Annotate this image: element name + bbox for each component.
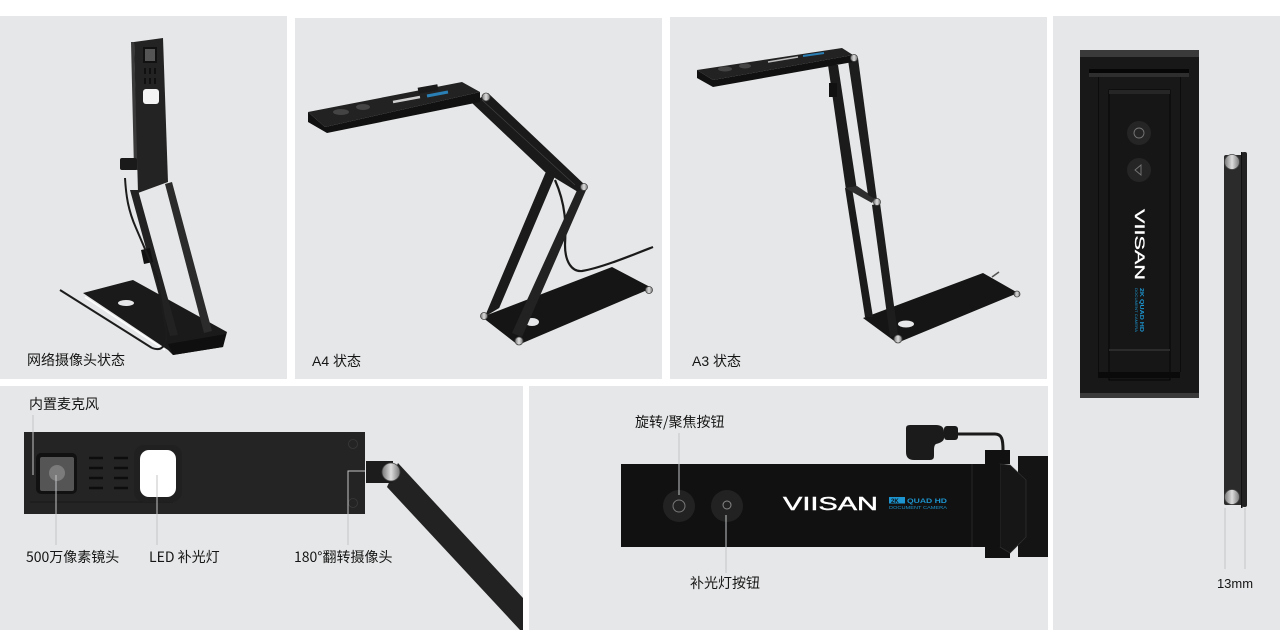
leader lines [33, 415, 365, 545]
icon: rotate focus button [1127, 121, 1151, 145]
light button [711, 490, 743, 522]
product: camera in webcam position [60, 38, 227, 355]
LED fill light [140, 450, 176, 497]
panel: folded size [1053, 16, 1280, 630]
dimension: thickness [1217, 508, 1253, 591]
label: A3 mode: A3 状态 [692, 353, 741, 369]
arm [387, 463, 523, 630]
label: light button: 补光灯按钮 [690, 573, 760, 593]
USB connector and cable [906, 425, 1003, 460]
panel: webcam mode [0, 16, 287, 379]
logo: quad HD vertical: DOCUMENT CAMERA [1134, 288, 1139, 332]
logo: quad HD vertical: 2K QUAD HD [1138, 288, 1144, 332]
screw: hinge pivot [382, 463, 400, 481]
logo: VIISAN: VIISAN [783, 494, 878, 514]
logo: VIISAN vertical: VIISAN [1132, 209, 1148, 280]
dimension: thickness: 13mm [1217, 576, 1253, 591]
label: microphone: 内置麦克风 [29, 394, 99, 414]
lens [36, 453, 77, 494]
hinge block [366, 461, 393, 483]
panel: back details [529, 386, 1048, 630]
icon: light button [1127, 158, 1151, 182]
leader lines [679, 433, 726, 573]
label: webcam mode: 网络摄像头状态 [27, 352, 125, 368]
label: rotate focus button: 旋转/聚焦按钮 [635, 412, 724, 432]
product: camera in A4 position [308, 82, 653, 345]
logo: 2K quad HD: 2K [891, 499, 899, 505]
logo: 2K quad HD [889, 497, 947, 510]
label: LED light: LED 补光灯 [149, 547, 220, 567]
logo: 2K quad HD: QUAD HD [907, 498, 947, 505]
product: folded camera top view [1080, 50, 1199, 398]
rotate focus button [663, 490, 695, 522]
label: A4 mode: A4 状态 [312, 353, 361, 369]
panel: front details [0, 386, 523, 630]
camera head bar [24, 432, 365, 514]
label: lens: 500万像素镜头 [26, 547, 119, 567]
camera head bar [621, 464, 1000, 547]
label: rotation: 180°翻转摄像头 [294, 547, 392, 567]
product: folded camera side view [1224, 152, 1247, 508]
logo: quad HD vertical [1134, 288, 1144, 332]
product: camera in A3 position [697, 48, 1020, 343]
logo: 2K quad HD: DOCUMENT CAMERA [889, 505, 947, 510]
panel: A4 mode [295, 18, 662, 379]
hinge assembly [985, 450, 1048, 558]
panel: A3 mode [670, 17, 1047, 379]
microphone slots [89, 458, 128, 488]
